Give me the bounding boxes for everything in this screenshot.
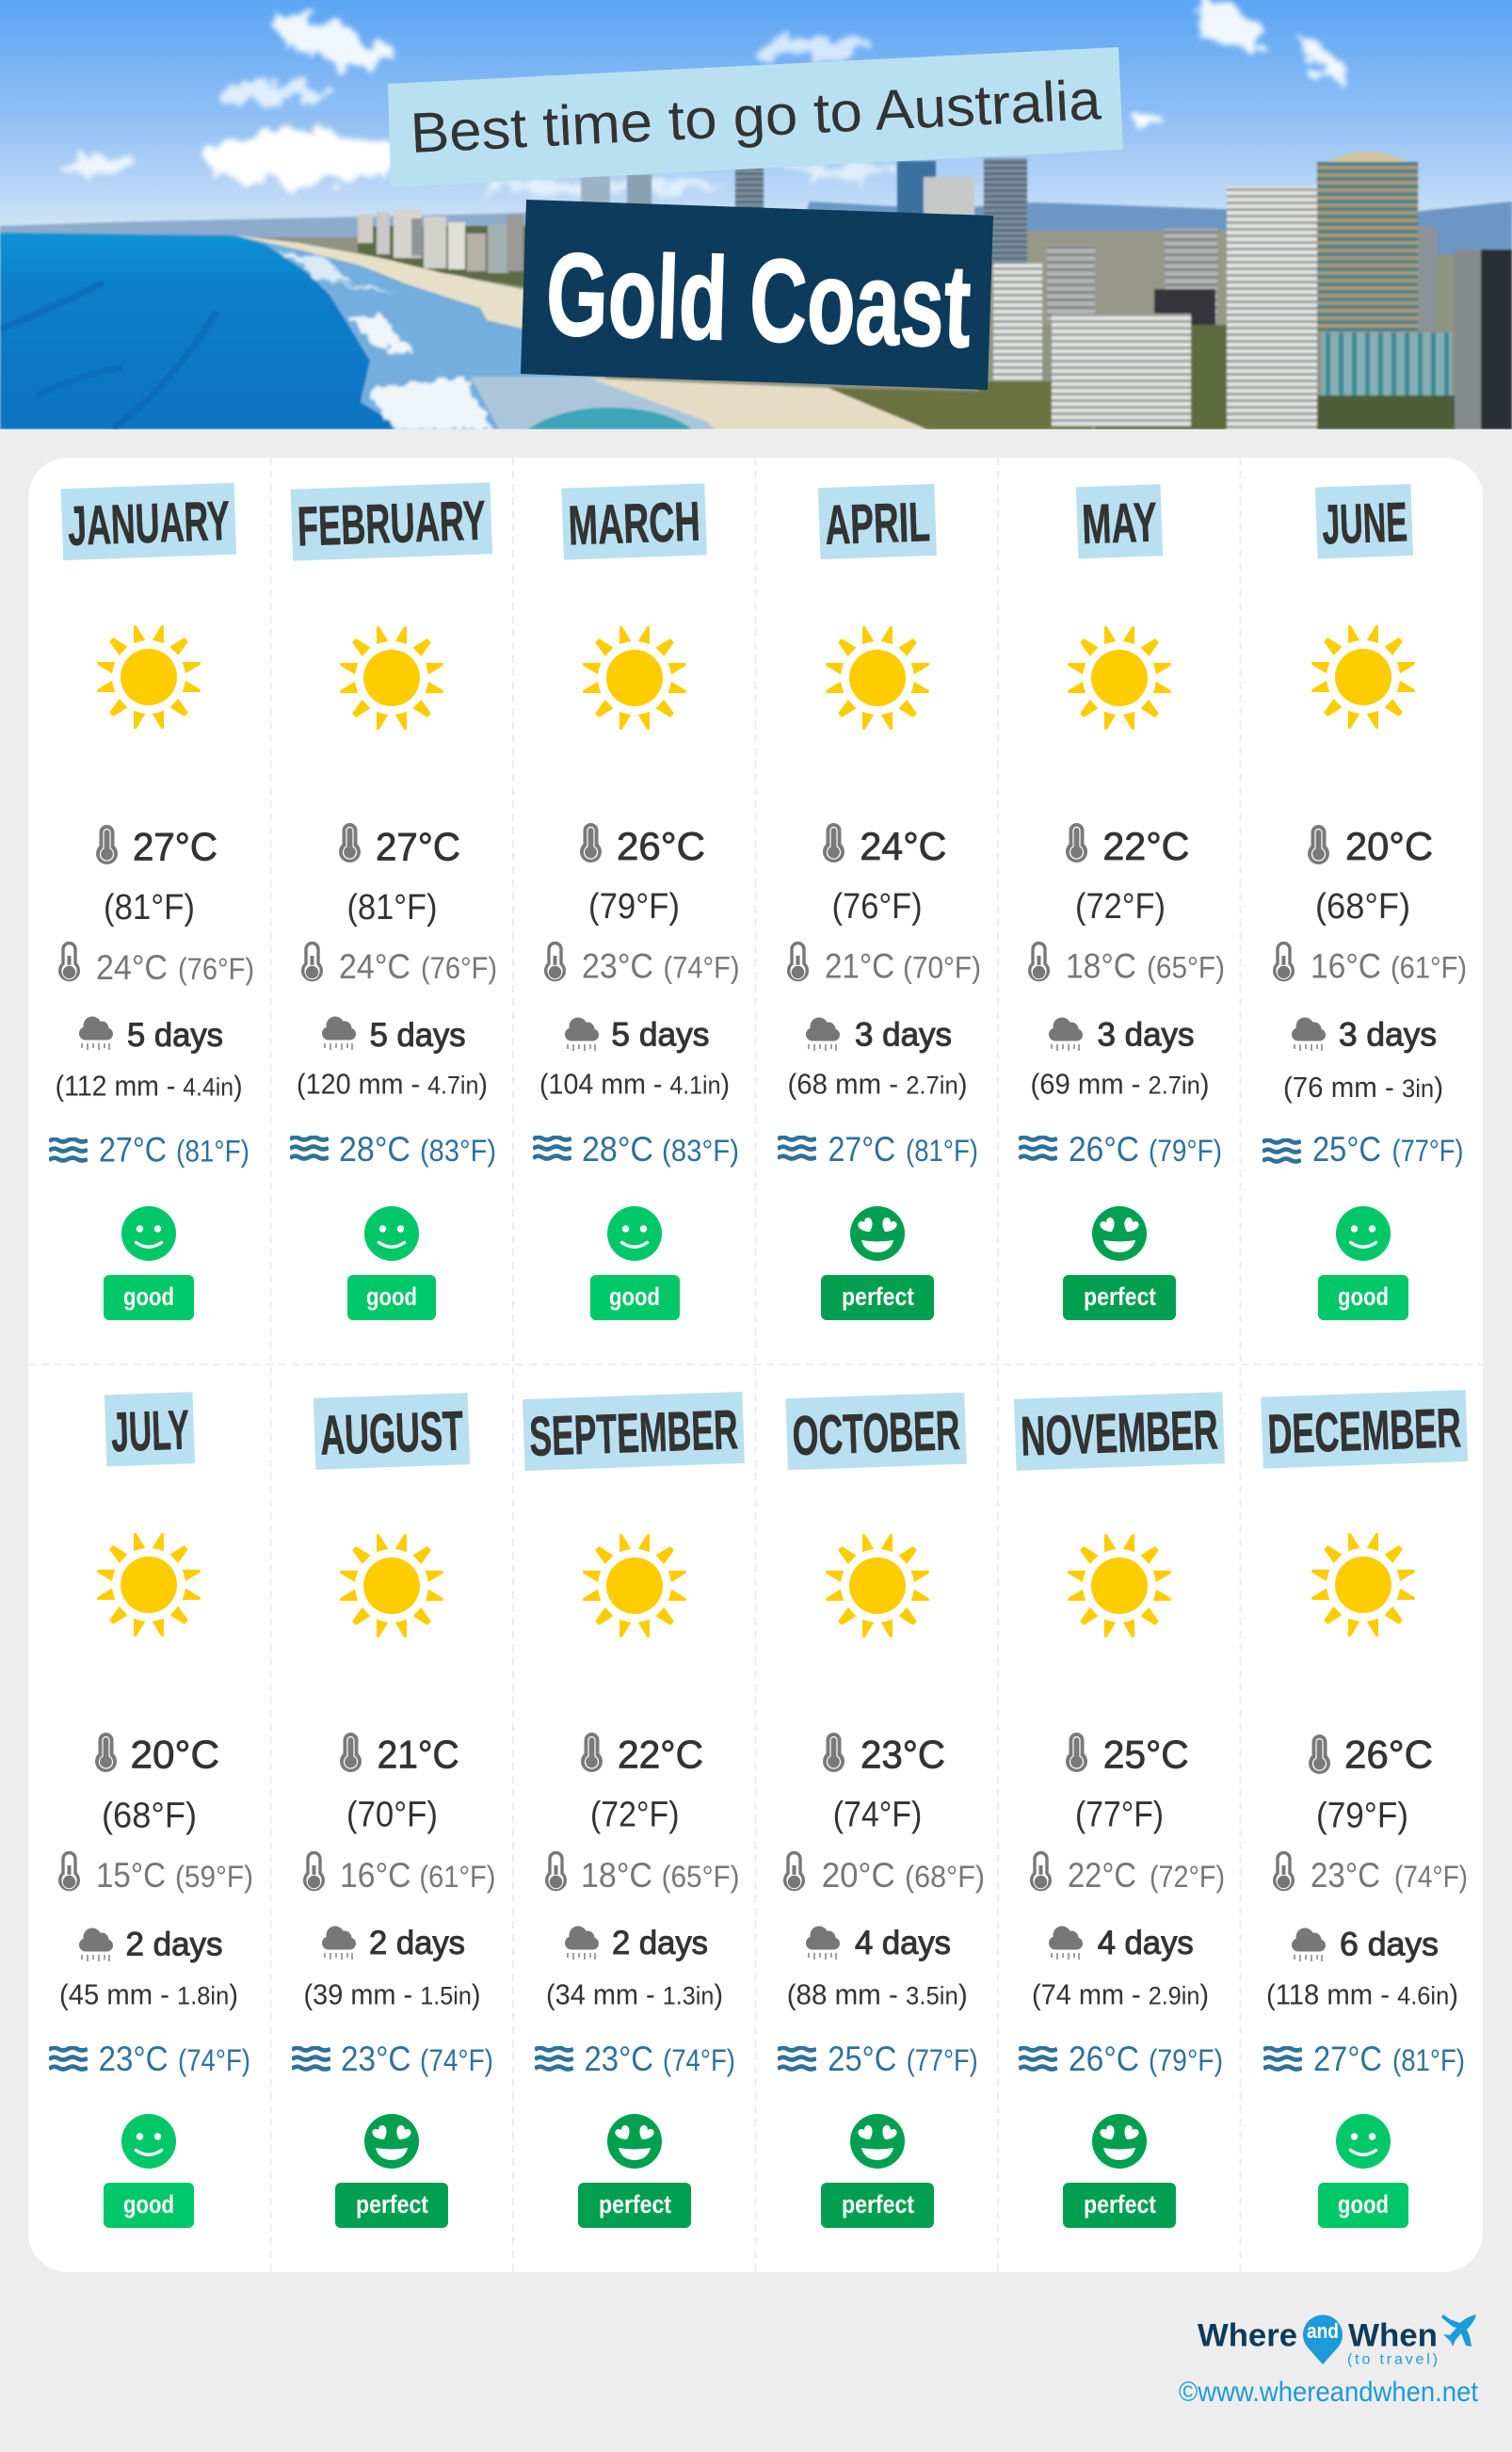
month label — [818, 484, 937, 559]
high temperature: 27°C — [133, 824, 217, 868]
sea temperature: 28°C — [339, 1130, 410, 1169]
rainfall — [56, 1017, 243, 1103]
rainfall: 3 days — [855, 1017, 952, 1054]
low temperature — [547, 1853, 740, 1895]
panel: November — [1014, 1392, 1225, 2228]
month label — [1014, 1392, 1225, 1471]
sea temperature: 27°C — [99, 1131, 167, 1170]
rainfall — [1266, 1927, 1458, 2010]
rainfall — [297, 1017, 488, 1101]
sea temperature — [778, 1130, 978, 1169]
month label: MAY — [1081, 491, 1158, 556]
panel: May — [1019, 484, 1225, 1320]
rainfall: 2 days — [369, 1925, 465, 1961]
rainfall: (45 mm - 1.8in) — [59, 1977, 238, 2010]
logo: Where and When: Where — [1198, 2318, 1297, 2354]
sea temperature: (81°F) — [1392, 2043, 1465, 2077]
rainfall: (69 mm - 2.7in) — [1030, 1068, 1209, 1101]
title banner: Best time to go to Australia — [409, 68, 1102, 165]
high temperature: (79°F) — [1316, 1797, 1408, 1836]
rainfall: (88 mm - 3.5in) — [787, 1977, 968, 2010]
land base — [252, 235, 1456, 429]
high temperature — [823, 823, 946, 927]
icon: sun — [340, 1534, 443, 1637]
rainfall — [59, 1927, 238, 2010]
rainfall: (118 mm - 4.6in) — [1266, 1977, 1458, 2010]
sea temperature: 27°C — [828, 1130, 895, 1169]
rating: good — [104, 2114, 194, 2228]
rainfall: (74 mm - 2.9in) — [1032, 1977, 1209, 2010]
city name banner — [521, 200, 993, 390]
rating: good — [590, 1206, 680, 1320]
high temperature: 20°C — [1345, 824, 1433, 868]
rainfall — [1030, 1017, 1209, 1101]
high temperature: 23°C — [861, 1732, 945, 1776]
low temperature: 21°C — [825, 946, 894, 985]
panel: September — [523, 1392, 745, 2228]
rating: perfect: perfect — [599, 2190, 671, 2218]
icon: sun — [97, 1533, 201, 1637]
low temperature: (74°F) — [663, 950, 740, 984]
high temperature: 24°C — [860, 824, 946, 868]
low temperature: 16°C — [1311, 946, 1381, 985]
icon: sun — [583, 626, 686, 730]
low temperature: (65°F) — [662, 1860, 740, 1894]
low temperature — [303, 944, 497, 986]
sea temperature: 26°C — [1069, 2040, 1139, 2078]
month label: APRIL — [824, 491, 931, 557]
sea temperature: (74°F) — [420, 2043, 493, 2077]
month label — [61, 483, 236, 560]
low temperature: (65°F) — [1147, 950, 1225, 984]
sea temperature — [778, 2040, 978, 2078]
sea temperature: (77°F) — [1391, 1134, 1463, 1168]
icon: sun — [1311, 625, 1415, 729]
high temperature: (72°F) — [1075, 887, 1166, 927]
rainfall: 3 days — [1098, 1017, 1194, 1054]
rainfall: 4 days — [1098, 1925, 1194, 1961]
website credit: ©www.whereandwhen.net — [1179, 2377, 1479, 2408]
panel: April — [778, 484, 981, 1320]
rating: perfect — [821, 1206, 934, 1320]
rating: perfect: perfect — [356, 2190, 428, 2218]
month label — [561, 483, 707, 560]
icon: sun — [340, 626, 443, 730]
surf foam — [278, 250, 494, 429]
low temperature — [546, 944, 740, 985]
sea temperature: (81°F) — [176, 1135, 249, 1169]
rating: perfect — [335, 2114, 448, 2228]
high temperature: 21°C — [378, 1732, 459, 1776]
rainfall — [1283, 1017, 1443, 1104]
low temperature — [305, 1853, 495, 1895]
title banner — [388, 47, 1123, 187]
sea temperature — [290, 1130, 496, 1169]
month label — [785, 1393, 967, 1470]
month label — [1076, 484, 1163, 558]
low temperature — [1275, 1853, 1468, 1895]
sea temperature — [533, 1130, 739, 1169]
sea temperature: (77°F) — [907, 2043, 978, 2077]
sea temperature — [1263, 1130, 1463, 1169]
month label: OCTOBER — [792, 1399, 961, 1467]
month label: JUNE — [1321, 491, 1408, 556]
high temperature: 26°C — [617, 824, 705, 868]
rating: good — [347, 1206, 436, 1320]
low temperature — [789, 944, 981, 985]
month label: AUGUST — [319, 1399, 464, 1467]
rating: perfect — [1063, 1206, 1176, 1320]
sea temperature: 25°C — [828, 2040, 896, 2078]
water — [0, 233, 405, 429]
panel: March — [533, 483, 740, 1320]
rating: good: good — [1338, 1282, 1389, 1311]
icon: sun — [97, 625, 201, 729]
rainfall: (112 mm - 4.4in) — [56, 1070, 243, 1103]
month label: SEPTEMBER — [528, 1398, 739, 1468]
month label — [314, 1393, 470, 1470]
low temperature: (61°F) — [419, 1860, 495, 1894]
low temperature: (76°F) — [178, 952, 254, 986]
logo: Where and When: When — [1348, 2318, 1438, 2354]
low temperature: 16°C — [340, 1856, 410, 1895]
high temperature — [1066, 823, 1189, 927]
low temperature: 24°C — [96, 948, 168, 987]
rating: perfect: perfect — [842, 1282, 914, 1311]
rainfall: (39 mm - 1.5in) — [303, 1977, 480, 2010]
panel: July — [49, 1392, 253, 2228]
sea temperature — [292, 2040, 493, 2078]
high temperature — [823, 1732, 945, 1834]
rainfall: (104 mm - 4.1in) — [539, 1068, 730, 1101]
month label — [523, 1392, 745, 1471]
rainfall: 5 days — [611, 1017, 709, 1054]
high temperature — [581, 1732, 703, 1834]
rainfall — [787, 1925, 968, 2010]
low temperature — [1275, 944, 1467, 985]
low temperature: (70°F) — [903, 950, 981, 984]
sea temperature: (74°F) — [178, 2043, 250, 2077]
logo: Where and When — [1198, 2315, 1476, 2368]
high temperature: (68°F) — [1315, 887, 1410, 927]
rainfall: 2 days — [126, 1927, 222, 1963]
low temperature — [60, 944, 254, 987]
sea temperature: (83°F) — [662, 1134, 739, 1168]
right towers — [1227, 186, 1317, 429]
icon: sun — [583, 1534, 686, 1637]
central city — [1026, 230, 1228, 290]
rainfall — [546, 1925, 723, 2010]
low temperature: 18°C — [581, 1856, 652, 1895]
high temperature — [580, 823, 705, 927]
rating: good: good — [366, 1282, 417, 1311]
rating: good — [1318, 2114, 1408, 2228]
high temperature: (76°F) — [832, 887, 923, 927]
rainfall — [1032, 1925, 1209, 2010]
sea temperature: (79°F) — [1149, 1134, 1222, 1168]
month label: MARCH — [568, 491, 701, 557]
high temperature — [1308, 824, 1433, 927]
icon: sun — [1068, 1534, 1171, 1637]
low temperature: (61°F) — [1391, 950, 1467, 984]
low temperature — [60, 1853, 253, 1895]
rating: perfect: perfect — [842, 2190, 914, 2218]
high temperature: 27°C — [376, 824, 460, 868]
high temperature: (77°F) — [1075, 1795, 1164, 1834]
panel: August — [292, 1393, 495, 2228]
month label — [1315, 484, 1413, 559]
rainfall: 5 days — [127, 1017, 223, 1054]
low temperature: 20°C — [822, 1856, 895, 1895]
month label: NOVEMBER — [1020, 1398, 1219, 1468]
low temperature: 22°C — [1068, 1856, 1136, 1895]
panel: February — [290, 482, 497, 1320]
sea temperature: 25°C — [1312, 1130, 1381, 1169]
low temperature: (76°F) — [421, 951, 497, 985]
sea temperature — [1019, 1130, 1222, 1169]
sea temperature — [1019, 2040, 1223, 2078]
logo: Where and When: (to travel) — [1347, 2352, 1438, 2368]
low temperature: (72°F) — [1150, 1860, 1225, 1894]
sea temperature: (81°F) — [906, 1134, 978, 1168]
low temperature: (59°F) — [175, 1860, 253, 1894]
sand — [235, 235, 527, 330]
low temperature: 15°C — [96, 1856, 166, 1895]
panel: October — [778, 1393, 985, 2228]
low temperature — [1030, 944, 1225, 985]
high temperature — [1066, 1732, 1189, 1834]
rainfall — [787, 1017, 968, 1101]
rating: perfect — [578, 2114, 691, 2228]
high temperature: (81°F) — [346, 888, 437, 928]
icon: sun — [826, 626, 929, 730]
sea temperature — [1263, 2040, 1465, 2078]
sea temperature: 28°C — [582, 1130, 653, 1169]
city name banner: Gold Coast — [544, 229, 973, 372]
high temperature: (68°F) — [102, 1797, 197, 1836]
month label — [291, 482, 492, 561]
rainfall: (120 mm - 4.7in) — [297, 1068, 488, 1101]
high temperature — [95, 1732, 219, 1836]
sea temperature: 23°C — [99, 2040, 169, 2078]
low temperature: 23°C — [1311, 1856, 1380, 1895]
hero photo: Gold Coast beach and skyline — [0, 0, 1512, 429]
high temperature: 26°C — [1344, 1732, 1433, 1776]
rainfall: 6 days — [1340, 1927, 1439, 1963]
high temperature: (72°F) — [590, 1795, 680, 1834]
rainfall: 3 days — [1339, 1017, 1437, 1054]
high temperature: 22°C — [618, 1732, 703, 1776]
rating: good: good — [123, 2190, 174, 2218]
low temperature: 24°C — [339, 947, 410, 986]
rating: perfect — [821, 2114, 934, 2228]
low temperature: (74°F) — [1394, 1860, 1468, 1894]
rating: perfect: perfect — [1084, 1282, 1156, 1311]
rainfall: 2 days — [612, 1925, 708, 1961]
rating: perfect — [1063, 2114, 1176, 2228]
logo: Where and When: and — [1307, 2319, 1339, 2343]
high temperature: 22°C — [1102, 824, 1189, 868]
high temperature: 20°C — [130, 1732, 219, 1776]
rainfall: (76 mm - 3in) — [1283, 1071, 1443, 1104]
icon: sun — [826, 1534, 929, 1637]
sea temperature: (74°F) — [663, 2043, 735, 2077]
sea temperature: (79°F) — [1149, 2043, 1223, 2077]
rating: good: good — [1338, 2190, 1389, 2218]
sea temperature: 27°C — [1313, 2040, 1382, 2078]
rainfall: (34 mm - 1.3in) — [546, 1977, 723, 2010]
low temperature — [785, 1853, 985, 1895]
high temperature — [96, 824, 217, 928]
rainfall: 4 days — [855, 1925, 951, 1961]
sea temperature — [535, 2040, 735, 2078]
rating: good — [104, 1206, 194, 1320]
month label — [105, 1392, 195, 1466]
high temperature: (81°F) — [104, 888, 195, 928]
shallow water — [243, 237, 591, 429]
distant left high-rises — [358, 226, 527, 287]
low temperature — [1032, 1853, 1225, 1895]
high temperature — [340, 1732, 459, 1834]
panel: December — [1261, 1390, 1468, 2228]
high temperature — [1309, 1732, 1433, 1836]
sea temperature: (83°F) — [420, 1134, 496, 1168]
low temperature: (68°F) — [905, 1860, 985, 1894]
high temperature — [339, 823, 460, 928]
sea temperature: 26°C — [1069, 1130, 1139, 1169]
low temperature: 23°C — [582, 946, 653, 985]
low temperature: 18°C — [1066, 946, 1136, 985]
panel: monthly calendar card — [28, 458, 1483, 2272]
high temperature: 25°C — [1103, 1732, 1189, 1776]
high temperature: (74°F) — [833, 1795, 922, 1834]
rainfall — [539, 1017, 730, 1101]
sea temperature: 23°C — [341, 2040, 410, 2078]
icon: sun — [1311, 1533, 1415, 1637]
rating: perfect: perfect — [1084, 2190, 1156, 2218]
panel: January — [49, 483, 254, 1320]
sea temperature — [49, 2040, 250, 2078]
month label: FEBRUARY — [297, 490, 487, 557]
rating: good: good — [123, 1282, 174, 1311]
rating: good — [1318, 1206, 1408, 1320]
month label: JULY — [110, 1398, 190, 1463]
rainfall: (68 mm - 2.7in) — [787, 1068, 968, 1101]
towers behind title — [581, 174, 610, 207]
panel: June — [1263, 484, 1467, 1320]
high temperature: (79°F) — [588, 887, 680, 927]
rainfall — [303, 1925, 480, 2010]
high temperature: (70°F) — [346, 1795, 438, 1834]
rating: good: good — [609, 1282, 660, 1311]
icon: sun — [1068, 626, 1171, 730]
sea temperature: 23°C — [584, 2040, 653, 2078]
sea temperature — [49, 1131, 249, 1170]
rainfall: 5 days — [370, 1017, 466, 1054]
month label: JANUARY — [67, 490, 231, 557]
